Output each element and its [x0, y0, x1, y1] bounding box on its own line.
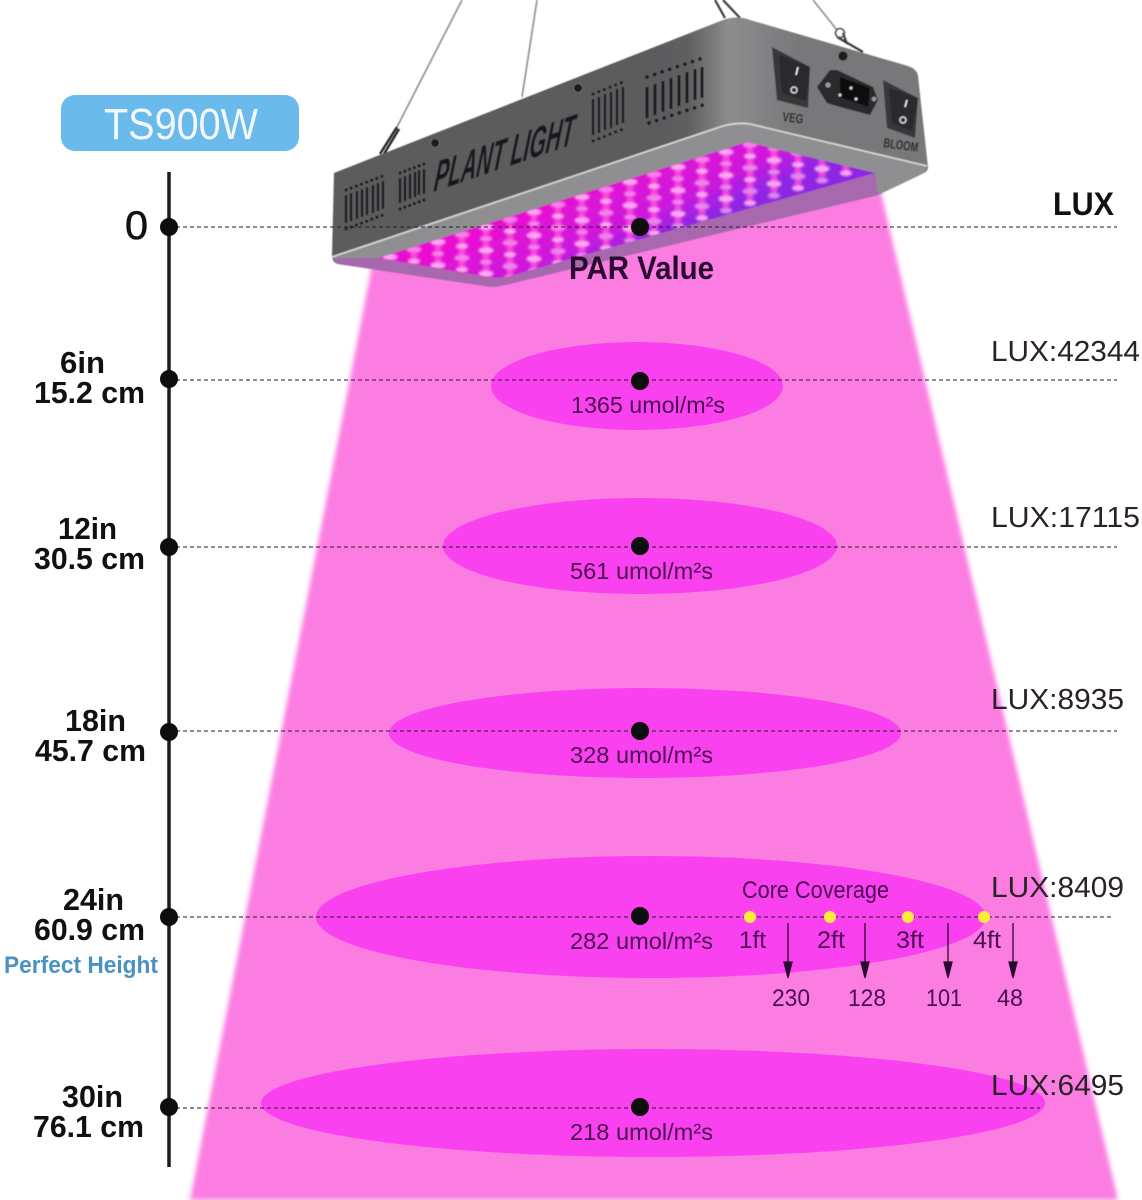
down arrows: [784, 923, 1017, 978]
coverage ellipse 12in: [443, 498, 837, 594]
distance labels: [739, 927, 1001, 954]
veg text: VEG: [782, 109, 804, 127]
grow light fixture: [332, 0, 928, 287]
LED dots: [382, 141, 876, 281]
LUX reading 6in: LUX:42344: [991, 336, 1140, 368]
PAR value heading: PAR Value: [569, 250, 714, 286]
bloom text: BLOOM: [883, 135, 919, 155]
model badge: [61, 95, 299, 151]
bloom switch: [883, 80, 918, 138]
lower bezel glow: [332, 173, 878, 287]
grow light fixture: PLANT LIGHT: [432, 104, 579, 202]
distance labels: 2ft: [817, 927, 845, 954]
height label 18in: [35, 703, 146, 768]
PAR values by distance: 230: [772, 985, 810, 1012]
height label 6in: [34, 345, 145, 410]
vents group 4: [647, 58, 703, 123]
LUX reading 18in: LUX:8935: [991, 684, 1124, 716]
PAR reading 18in: 328 umol/m²s: [570, 742, 713, 768]
dotted guide lines: [169, 227, 1117, 1108]
core coverage callout: [739, 877, 1023, 1012]
bezel highlight: [332, 123, 927, 257]
coverage ellipse 18in: [389, 688, 901, 778]
PAR reading 6in: 1365 umol/m²s: [571, 392, 725, 418]
PAR reading 12in: 561 umol/m²s: [570, 558, 713, 584]
height label 24in: 24in: [63, 882, 124, 917]
bottom bezel: [332, 123, 927, 287]
height label 6in: 15.2 cm: [34, 375, 145, 410]
distance labels: 4ft: [973, 927, 1001, 954]
PAR reading 24in: 282 umol/m²s: [570, 928, 713, 954]
vents group 2: [400, 164, 424, 209]
coverage ellipse 24in: [316, 856, 986, 978]
PAR reading 30in: 218 umol/m²s: [570, 1119, 713, 1145]
PAR values by distance: [772, 985, 1023, 1012]
power inlet: [817, 70, 878, 115]
height label 12in: 12in: [58, 511, 117, 546]
LED panel: [378, 142, 875, 278]
PAR values by distance: 48: [997, 985, 1023, 1012]
PAR values by distance: 128: [848, 985, 886, 1012]
model badge: TS900W: [104, 100, 258, 149]
height label 24in: 60.9 cm: [34, 912, 145, 947]
distance dots: [744, 911, 990, 923]
PAR values by distance: 101: [926, 985, 962, 1012]
height label 24in: [34, 882, 145, 947]
fixture body: [332, 18, 928, 287]
coverage ellipse 6in: [491, 342, 783, 430]
perfect height note: Perfect Height: [4, 952, 158, 979]
height label 30in: 30in: [62, 1079, 123, 1114]
height label 18in: 18in: [65, 703, 126, 738]
center markers: [631, 218, 649, 1116]
height label 6in: 6in: [60, 345, 105, 380]
height label 12in: [34, 511, 145, 576]
vents group 3: [593, 82, 623, 141]
coverage ellipse 30in: [261, 1049, 1045, 1157]
core coverage heading: Core Coverage: [742, 877, 889, 904]
vents group 1: [346, 176, 383, 229]
LUX reading 12in: LUX:17115: [991, 502, 1140, 534]
LUX reading 24in: LUX:8409: [991, 872, 1124, 904]
axis markers: [160, 218, 178, 1116]
LUX heading: LUX: [1053, 186, 1115, 222]
hanging wires: [380, 0, 863, 154]
distance labels: 3ft: [896, 927, 924, 954]
veg switch: [772, 47, 810, 108]
distance labels: 1ft: [739, 927, 766, 954]
height label 30in: 76.1 cm: [33, 1109, 144, 1144]
height axis: [167, 172, 171, 1167]
LUX reading 30in: LUX:6495: [991, 1070, 1124, 1102]
height label 30in: [33, 1079, 144, 1144]
light beam: [190, 180, 1118, 1200]
height label 0: 0: [125, 204, 148, 248]
height label 12in: 30.5 cm: [34, 541, 145, 576]
height label 18in: 45.7 cm: [35, 733, 146, 768]
screws: [430, 51, 848, 148]
